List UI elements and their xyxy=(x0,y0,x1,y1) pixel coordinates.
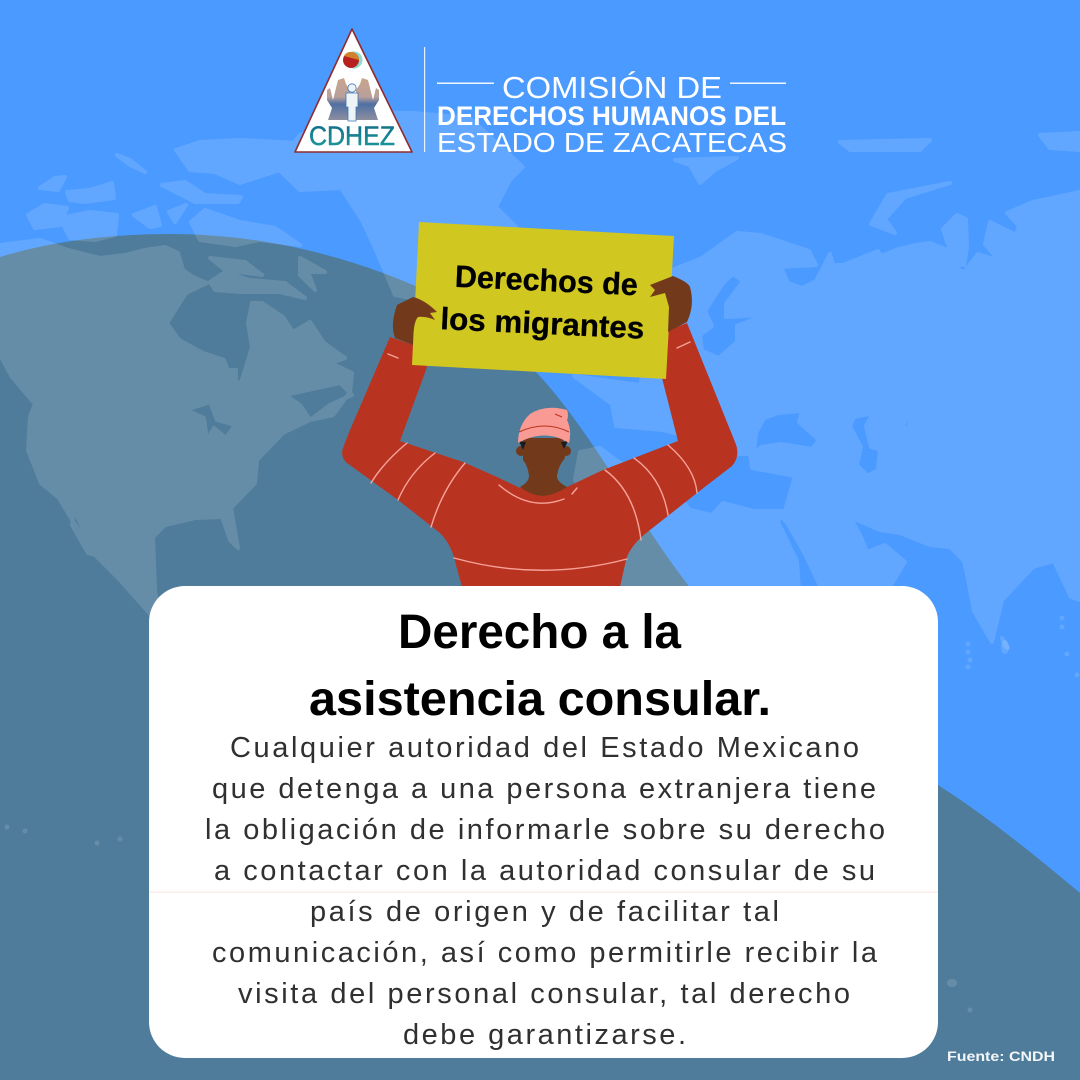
eurasia xyxy=(574,192,1080,642)
card body: Cualquier autoridad del Estado Mexicano xyxy=(230,732,859,764)
header rule left xyxy=(437,82,494,84)
sign text: los migrantes xyxy=(440,301,645,346)
card body xyxy=(205,732,885,1051)
logo person xyxy=(346,84,358,121)
card background xyxy=(149,586,938,1058)
sign text xyxy=(440,258,647,346)
map dots xyxy=(4,616,1080,1012)
card body: a contactar con la autoridad consular de su xyxy=(214,855,875,887)
sweater xyxy=(342,323,737,587)
hair xyxy=(519,441,568,450)
left hand xyxy=(393,297,437,345)
header line 3: ESTADO DE ZACATECAS xyxy=(437,127,787,158)
card body: debe garantizarse. xyxy=(403,1019,686,1051)
hat xyxy=(518,408,570,443)
header line 2: DERECHOS HUMANOS DEL xyxy=(437,101,786,131)
header line 1: COMISIÓN DE xyxy=(502,70,722,105)
logo divider xyxy=(424,47,425,152)
arctic islands xyxy=(28,140,325,298)
sign text: Derechos de xyxy=(454,259,639,302)
sweater lines xyxy=(371,342,697,570)
protest sign xyxy=(393,222,692,379)
logo xyxy=(295,29,412,152)
logo triangle xyxy=(295,29,412,152)
sign board xyxy=(412,222,674,379)
right hand xyxy=(650,276,692,332)
text card xyxy=(149,586,938,1058)
north america xyxy=(0,240,352,625)
card body: la obligación de informarle sobre su derecho xyxy=(205,814,885,846)
card heading: asistencia consular. xyxy=(309,673,771,726)
northern russian and atlantic islands xyxy=(675,133,1080,648)
card body: visita del personal consular, tal derecho xyxy=(238,978,850,1010)
africa xyxy=(575,448,799,590)
greenland xyxy=(276,112,523,300)
card heading xyxy=(309,606,771,726)
logo acronym: CDHEZ xyxy=(309,121,395,151)
logo hands xyxy=(327,78,379,120)
card body: país de origen y de facilitar tal xyxy=(310,896,779,928)
world map xyxy=(0,112,1080,648)
head xyxy=(516,438,571,496)
header text xyxy=(437,70,787,158)
globe silhouette xyxy=(0,234,1080,1080)
card body: que detenga a una persona extranjera tiene xyxy=(212,773,876,805)
source note: Fuente: CNDH xyxy=(947,1048,1055,1064)
logo sun xyxy=(343,52,362,68)
header rule right xyxy=(730,82,786,84)
person xyxy=(342,323,737,587)
card heading: Derecho a la xyxy=(398,606,681,659)
card body: comunicación, así como permitirle recibir la xyxy=(212,937,878,969)
card hairline xyxy=(149,892,938,893)
